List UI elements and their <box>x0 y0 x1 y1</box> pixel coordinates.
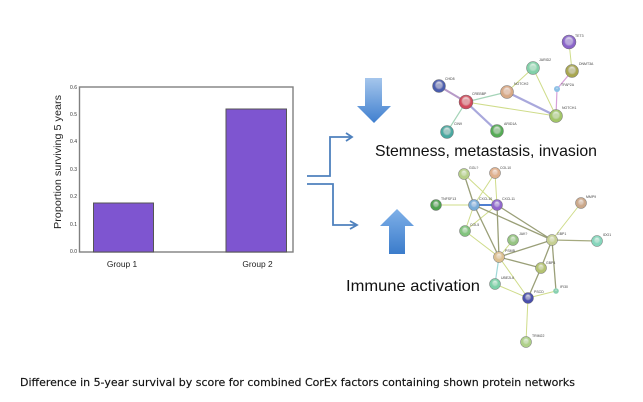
icon: up block arrow <box>380 209 414 254</box>
node labels: DNMT3A <box>579 62 594 66</box>
y-axis tick labels: 0.0 <box>70 249 77 255</box>
node: DNMT3A <box>566 64 578 78</box>
node labels: CHD8 <box>445 77 455 81</box>
node: PSCD <box>522 292 534 304</box>
y-axis tick labels: 0.1 <box>70 222 77 228</box>
node labels: GGL? <box>469 166 478 170</box>
node labels: CXCL11 <box>502 197 515 201</box>
node labels: ARID1A <box>504 122 517 126</box>
node: TET3 <box>562 35 576 49</box>
node: ARID1A <box>490 124 504 138</box>
node: CIN9 <box>440 126 454 138</box>
bar: Group 2 <box>226 109 286 252</box>
node labels: GBP4 <box>546 261 555 265</box>
node: IFI30 <box>553 288 559 294</box>
node: CREBBP <box>459 95 473 109</box>
node labels: CIN9 <box>454 122 462 126</box>
node labels: IFI30 <box>560 285 568 289</box>
network: stemness proteins <box>432 34 594 138</box>
node labels: CREBBP <box>472 92 487 96</box>
node labels: UBE2L6 <box>501 276 514 280</box>
node labels: JARID2 <box>539 58 551 62</box>
node labels: GBP1 <box>557 232 566 236</box>
node: JAK <box>508 234 518 246</box>
y-axis tick labels: 0.2 <box>70 194 77 200</box>
heading: stemness label: Stemness, metastasis, invasion <box>375 143 597 160</box>
node labels: TET3 <box>575 34 584 38</box>
node labels <box>445 34 594 126</box>
node labels: MMP9 <box>586 195 596 199</box>
node: NOTCH1 <box>550 110 562 122</box>
node labels: COL5 <box>470 223 479 227</box>
node: TFAP2A <box>554 86 560 92</box>
network edges <box>439 42 572 132</box>
caption: Difference in 5-year survival by score for combined CorEx factors containing shown protein networks <box>20 377 575 389</box>
node: COL <box>490 168 500 178</box>
node labels: NOTCH2 <box>514 82 528 86</box>
node: CHD8 <box>432 80 446 92</box>
y-axis tick labels: 0.4 <box>70 139 77 145</box>
node: NOTCH2 <box>500 86 514 98</box>
node: GBP4 <box>536 262 546 274</box>
x label: Group 2: Group 2 <box>242 259 273 269</box>
node labels: PSCD <box>534 290 544 294</box>
node labels: COL10 <box>500 166 511 170</box>
network edges <box>436 173 597 342</box>
y-axis tick labels <box>70 85 77 255</box>
y-axis tick labels: 0.3 <box>70 167 77 173</box>
node: PSMB <box>494 252 504 262</box>
node labels: CXCL10 <box>479 197 492 201</box>
node: COL5 <box>460 226 470 236</box>
node: TNFSF13 <box>430 200 442 210</box>
chart axes frame <box>80 87 293 252</box>
node: IDO1 <box>592 236 602 246</box>
node: CXCL11 <box>492 200 502 210</box>
node labels: PSMB <box>505 249 516 253</box>
node labels: NOTCH1 <box>562 106 576 110</box>
network: immune proteins <box>430 166 611 348</box>
node: MMP <box>576 198 586 208</box>
node labels: IDO1 <box>603 233 611 237</box>
node labels: TRIM22 <box>532 334 544 338</box>
node: TRIM22 <box>520 336 532 348</box>
y-axis tick labels: 0.6 <box>70 85 77 91</box>
heading: immune label: Immune activation <box>346 278 480 295</box>
x label: Group 1: Group 1 <box>107 259 137 269</box>
icon: down block arrow <box>357 78 391 123</box>
arrow: to immune network <box>307 184 357 229</box>
node: CXCL10 <box>468 200 480 210</box>
node labels <box>441 166 611 338</box>
arrow: to stemness network <box>307 133 352 176</box>
node: JARID2 <box>526 62 540 74</box>
bar: Group 1 <box>94 203 154 252</box>
node labels: TFAP2A <box>561 83 575 87</box>
y-axis tick labels: 0.5 <box>70 112 77 118</box>
y-axis title: Proportion surviving 5 years <box>52 95 64 229</box>
node labels: JAK? <box>519 232 527 236</box>
bar chart <box>52 85 293 269</box>
node labels: TNFSF13 <box>441 197 456 201</box>
node: GBP1 <box>546 234 558 246</box>
node: GGL <box>458 168 470 180</box>
node: UBE2L6 <box>490 278 500 290</box>
